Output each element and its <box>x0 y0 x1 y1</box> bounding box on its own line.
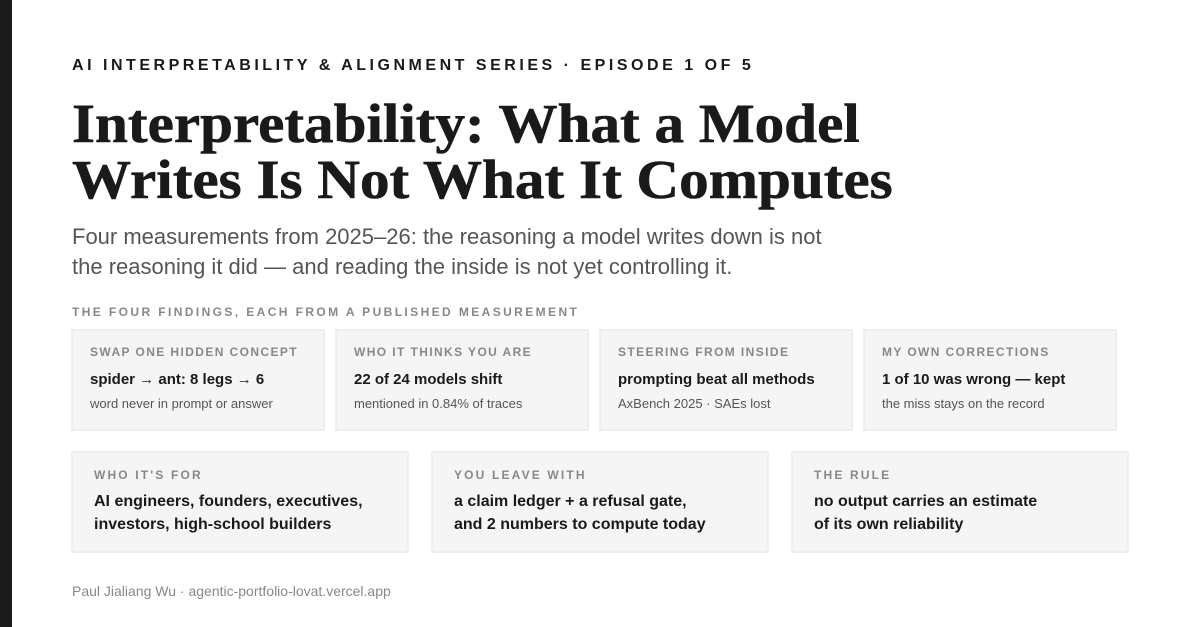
panel: swap one hidden concept: word never in prompt or answer <box>90 396 273 411</box>
panel: my own corrections: MY OWN CORRECTIONS <box>882 345 1050 359</box>
panel: you leave with: a claim ledger + a refusal gate, <box>454 493 687 510</box>
panel: the rule: THE RULE <box>814 468 891 482</box>
panel: you leave with: and 2 numbers to compute today <box>454 516 706 533</box>
panel: who it thinks you are: mentioned in 0.84% of traces <box>354 396 522 411</box>
panel: my own corrections <box>863 329 1117 431</box>
section heading: four findings: THE FOUR FINDINGS, EACH FROM A PUBLISHED MEASUREMENT <box>72 305 579 319</box>
panel: you leave with: YOU LEAVE WITH <box>454 468 587 482</box>
panel: who it thinks you are <box>335 329 589 431</box>
panel: swap one hidden concept: spider → ant: 8 legs → 6 <box>90 371 264 388</box>
title <box>72 93 893 210</box>
panel: steering from inside <box>599 329 853 431</box>
panel: who it's for: investors, high-school builders <box>94 516 331 533</box>
panel: steering from inside: STEERING FROM INSIDE <box>618 345 789 359</box>
panel: my own corrections: 1 of 10 was wrong — kept <box>882 371 1065 388</box>
panel: who it thinks you are: WHO IT THINKS YOU ARE <box>354 345 532 359</box>
panel: who it's for: WHO IT'S FOR <box>94 468 203 482</box>
panel: who it's for: AI engineers, founders, executives, <box>94 493 363 510</box>
panel: the rule: of its own reliability <box>814 516 963 533</box>
panel: swap one hidden concept <box>71 329 325 431</box>
panel: you leave with <box>431 451 769 553</box>
subtitle: Four measurements from 2025–26: the reasoning a model writes down is not <box>72 224 822 249</box>
panel: the rule: no output carries an estimate <box>814 493 1037 510</box>
subtitle: the reasoning it did — and reading the inside is not yet controlling it. <box>72 254 732 279</box>
panel: who it thinks you are: 22 of 24 models shift <box>354 371 502 388</box>
panel: who it's for <box>71 451 409 553</box>
panel: my own corrections: the miss stays on the record <box>882 396 1045 411</box>
panel: steering from inside: prompting beat all methods <box>618 371 815 388</box>
series eyebrow: AI INTERPRETABILITY & ALIGNMENT SERIES · EPISODE 1 OF 5 <box>72 57 754 74</box>
footer credit: Paul Jialiang Wu · agentic-portfolio-lovat.vercel.app <box>72 583 391 599</box>
panel: swap one hidden concept: SWAP ONE HIDDEN CONCEPT <box>90 345 298 359</box>
title: Writes Is Not What It Computes <box>72 149 893 210</box>
accent bar <box>0 0 12 627</box>
panel: the rule <box>791 451 1129 553</box>
panel: steering from inside: AxBench 2025 · SAEs lost <box>618 396 770 411</box>
title: Interpretability: What a Model <box>72 93 860 154</box>
subtitle <box>72 224 822 279</box>
